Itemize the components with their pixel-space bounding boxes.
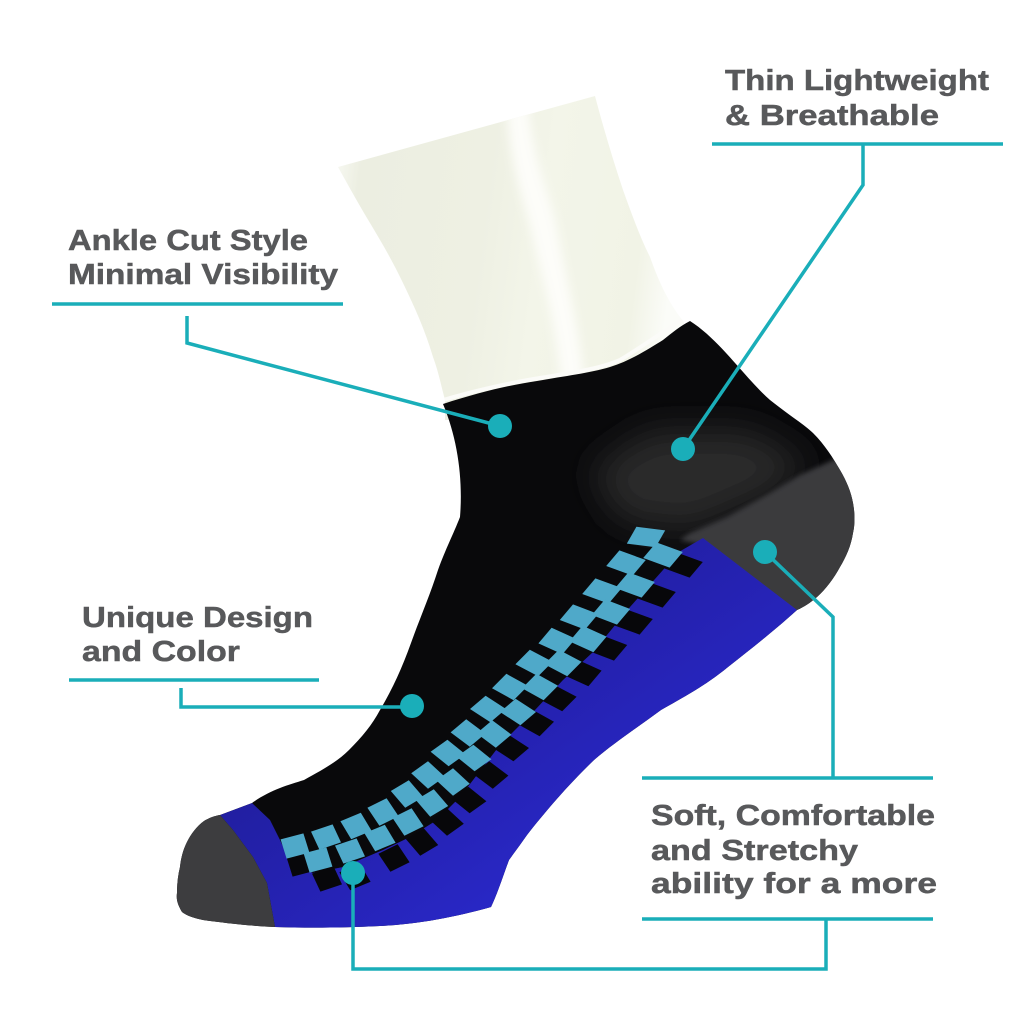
sock (165, 321, 880, 940)
sock black body (177, 321, 854, 928)
leader line (683, 144, 1003, 449)
heading: Thin Lightweight (725, 65, 989, 97)
heading: & Breathable (725, 100, 939, 132)
heading: Minimal Visibility (68, 259, 338, 291)
blue sole (220, 538, 797, 940)
leader line (52, 304, 500, 426)
heel mesh shading (590, 430, 810, 530)
dot (671, 437, 695, 461)
light blue squares, lower row (304, 542, 683, 873)
heading: Ankle Cut Style (68, 225, 308, 257)
black squares (287, 552, 703, 892)
callout: unique design and color (69, 602, 424, 718)
toe dot (341, 861, 365, 885)
leader line (69, 680, 412, 707)
upper rule and leader to heel (642, 552, 933, 778)
callout: soft, comfortable and stretchy (341, 540, 937, 969)
checker pattern (281, 527, 703, 892)
heading: and Stretchy (651, 835, 858, 867)
dot (400, 694, 424, 718)
lower rule and leader to toe (353, 873, 933, 969)
grey toe (176, 815, 275, 927)
heading: Unique Design (82, 602, 313, 634)
heading: ability for a more (651, 868, 937, 900)
heading: and Color (82, 636, 240, 668)
callout: ankle cut style (52, 225, 512, 438)
light blue squares, upper row (281, 527, 665, 859)
heel dot (753, 540, 777, 564)
mannequin ankle (338, 96, 690, 420)
dot (488, 414, 512, 438)
callout: thin lightweight and breathable (671, 65, 1003, 461)
heading: Soft, Comfortable (651, 800, 935, 832)
grey heel (681, 458, 854, 616)
